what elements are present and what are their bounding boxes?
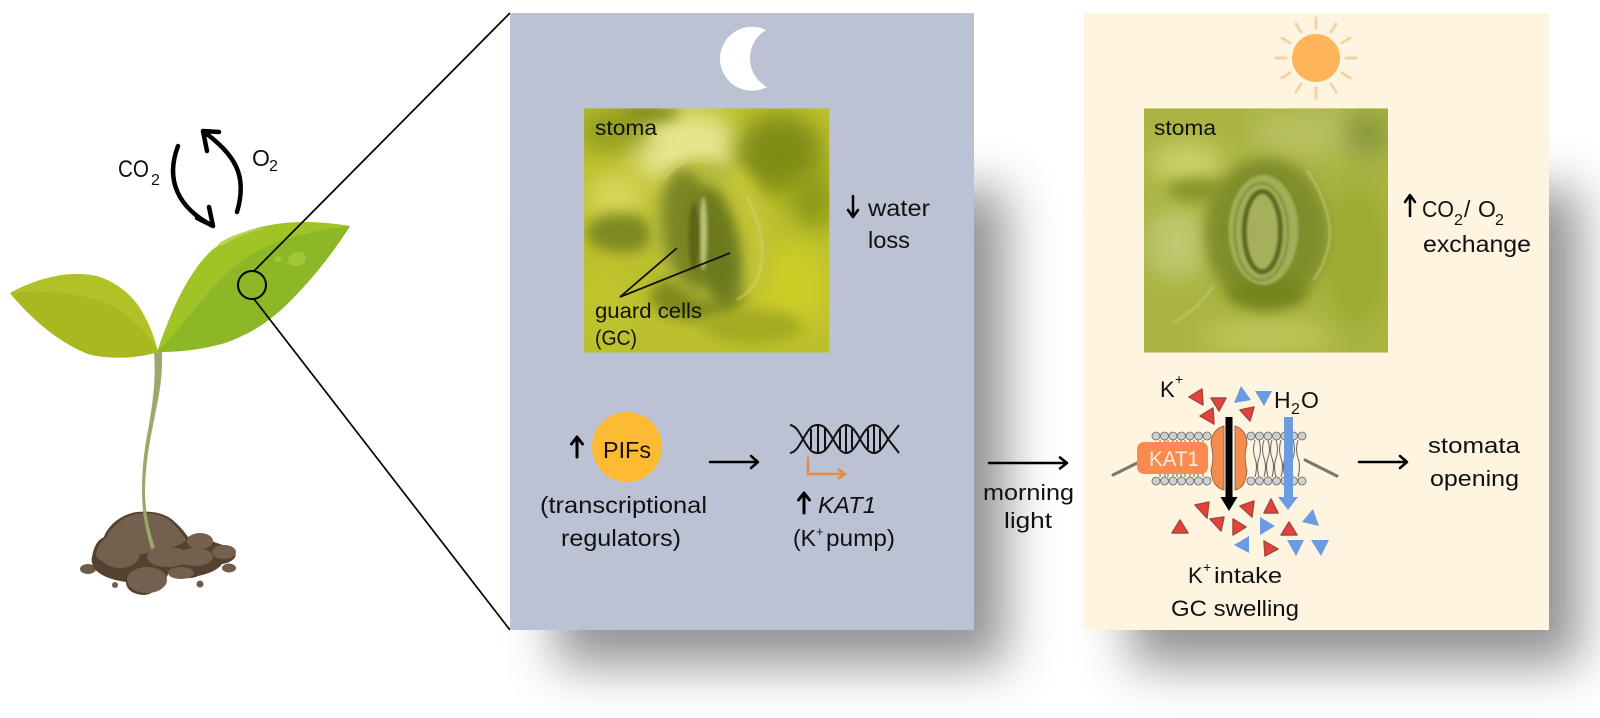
PIFs: PIFs bbox=[603, 437, 651, 463]
arrow: water intake bbox=[1278, 417, 1298, 510]
label: K+ intake GC swelling: + bbox=[1203, 559, 1211, 575]
label: O2: O bbox=[252, 145, 270, 171]
CO2/O2 exchange: exchange bbox=[1423, 231, 1531, 257]
photo: closed stoma bbox=[577, 105, 837, 353]
membrane with KAT1 channel: KAT1 bbox=[1149, 448, 1199, 471]
stem bbox=[142, 352, 162, 549]
channel halves bbox=[1211, 426, 1247, 490]
lipid tails bbox=[1160, 440, 1300, 477]
icon: sun bbox=[1276, 18, 1356, 98]
label: stomata opening bbox=[1428, 433, 1521, 491]
water loss: loss bbox=[868, 227, 910, 253]
KAT1 label: KAT1 bbox=[818, 492, 876, 518]
label: CO2: 2 bbox=[151, 172, 160, 189]
label: K+: K bbox=[1160, 377, 1175, 402]
soil bbox=[80, 512, 236, 595]
KAT1 label bbox=[793, 492, 895, 551]
label: H2O: 2 bbox=[1291, 401, 1300, 418]
label: stomata opening: opening bbox=[1430, 466, 1519, 491]
label: H2O: O bbox=[1301, 387, 1319, 413]
PIFs: regulators) bbox=[561, 525, 681, 551]
gas exchange arrows bbox=[173, 131, 241, 226]
arrow: morning light: light bbox=[1004, 508, 1052, 533]
label: K+ intake GC swelling: K bbox=[1188, 563, 1203, 588]
icon: moon bbox=[720, 27, 767, 91]
membrane with KAT1 channel bbox=[1113, 426, 1337, 490]
label: K+ intake GC swelling: GC swelling bbox=[1171, 596, 1299, 621]
label: K+ intake GC swelling bbox=[1171, 559, 1299, 621]
CO2/O2 exchange: 2 bbox=[1495, 212, 1504, 229]
CO2/O2 exchange: / bbox=[1464, 196, 1471, 222]
label: guard cells bbox=[595, 300, 702, 350]
left leaf bbox=[10, 274, 158, 358]
label: stoma: stoma bbox=[595, 117, 657, 140]
panel: day bbox=[1084, 13, 1549, 630]
label: K+ bbox=[1160, 371, 1183, 402]
label: O2: 2 bbox=[269, 158, 278, 175]
label: H2O bbox=[1274, 387, 1319, 418]
guard cell pointer lines bbox=[620, 248, 730, 297]
label: stomata opening: stomata bbox=[1428, 433, 1521, 458]
PIFs bbox=[540, 412, 707, 551]
ions: water triangles bbox=[1234, 386, 1329, 556]
label: O2 bbox=[252, 145, 278, 175]
PIFs: (transcriptional bbox=[540, 492, 707, 518]
ions: potassium triangles bbox=[1172, 389, 1297, 556]
CO2/O2 exchange: 2 bbox=[1454, 212, 1463, 229]
panel shadows bbox=[556, 190, 1580, 665]
KAT1 label: pump) bbox=[826, 525, 895, 551]
plant illustration bbox=[10, 222, 350, 595]
photo: open stoma bbox=[1144, 108, 1390, 353]
label: stoma: stoma bbox=[1154, 117, 1216, 140]
arrow: potassium intake bbox=[1220, 417, 1238, 511]
label: H2O: H bbox=[1274, 387, 1291, 413]
label: guard cells: guard cells bbox=[595, 300, 702, 323]
KAT1 label: (K bbox=[793, 525, 817, 551]
zoom lines from leaf to panel bbox=[238, 13, 510, 630]
lipid heads bbox=[1152, 432, 1306, 485]
arrow: morning light bbox=[983, 458, 1074, 533]
CO2/O2 exchange: O bbox=[1478, 196, 1496, 222]
arrow: to stomata opening bbox=[1359, 456, 1407, 468]
icon: DNA with promoter arrow bbox=[790, 425, 899, 479]
KAT1 box bbox=[1137, 442, 1208, 474]
CO2/O2 exchange bbox=[1405, 195, 1531, 257]
KAT1 label: + bbox=[816, 524, 824, 539]
arrow: morning light: morning bbox=[983, 480, 1074, 505]
water loss bbox=[848, 195, 930, 253]
right leaf bbox=[157, 222, 350, 352]
water loss: water bbox=[867, 195, 930, 221]
label: CO2: CO bbox=[118, 156, 149, 183]
panel: night bbox=[510, 13, 974, 630]
CO2/O2 exchange: CO bbox=[1422, 196, 1454, 222]
label: K+: + bbox=[1175, 371, 1183, 387]
label: K+ intake GC swelling: intake bbox=[1214, 563, 1282, 588]
arrow: PIFs to KAT1 bbox=[710, 456, 758, 468]
label: guard cells: (GC) bbox=[595, 327, 637, 350]
